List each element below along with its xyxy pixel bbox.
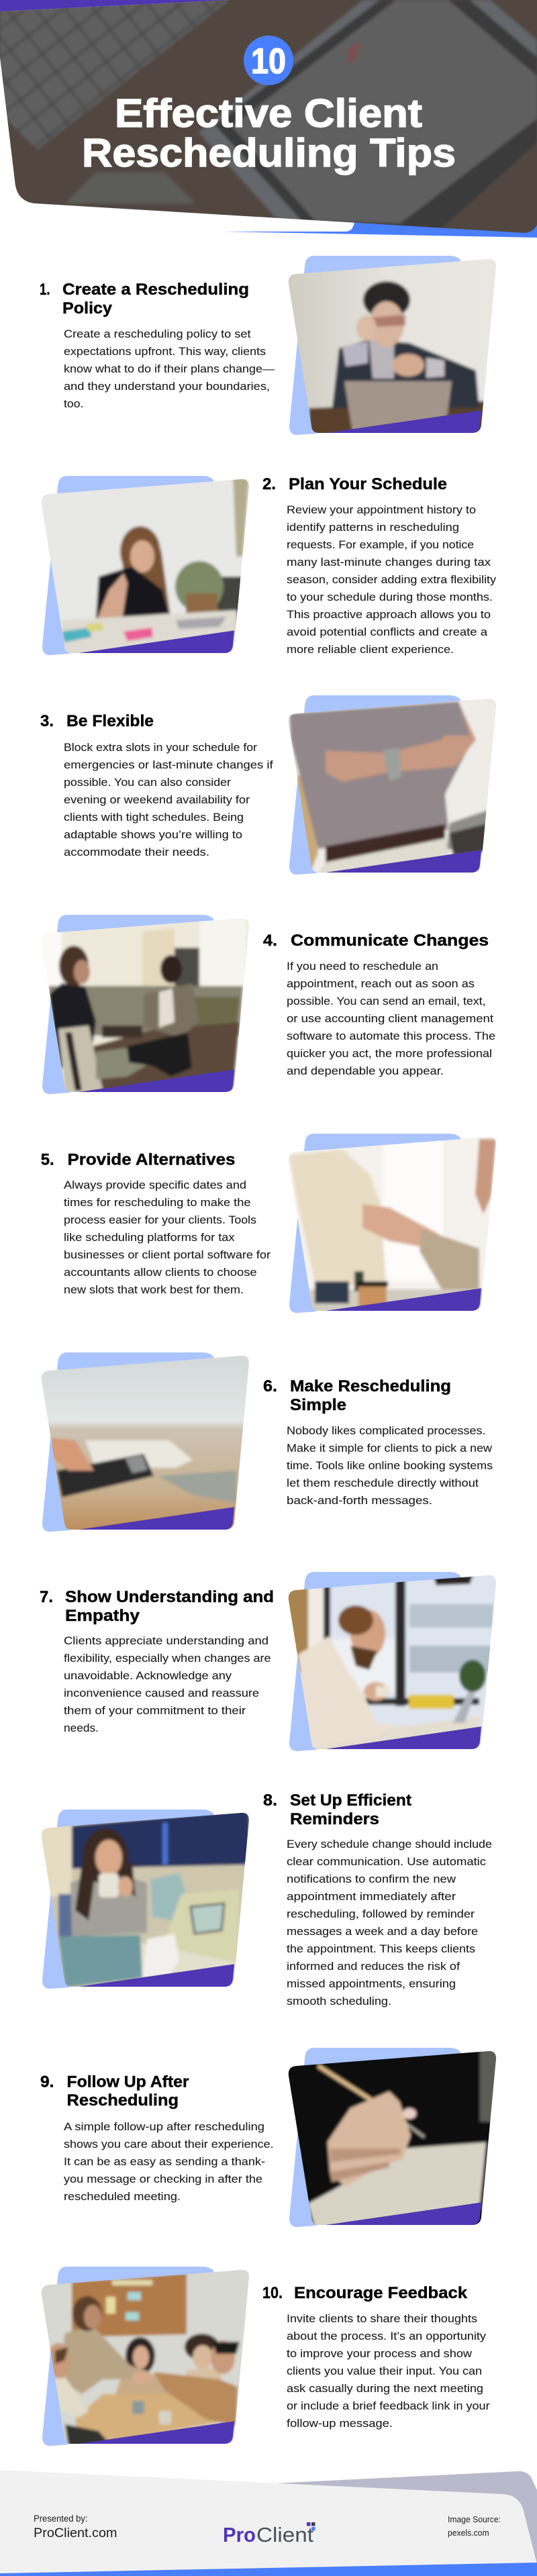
- tip 1 text: expectations upfront. This way, clients: [64, 346, 266, 358]
- tip 9 heading: 9.: [40, 2073, 54, 2091]
- presented by: ProClient.com: [34, 2526, 117, 2540]
- tip 2 heading: Plan Your Schedule: [289, 475, 447, 493]
- tip 9 text: shows you care about their experience.: [64, 2138, 274, 2150]
- tip 1 heading: Policy: [62, 299, 112, 317]
- tip 9 text: A simple follow-up after rescheduling: [64, 2121, 264, 2133]
- tip 6 text: let them reschedule directly without: [287, 1477, 479, 1489]
- tip 4 heading: Communicate Changes: [291, 932, 489, 950]
- tip 2 text: more reliable client experience.: [287, 644, 454, 656]
- tip 7 text: Clients appreciate understanding and: [64, 1635, 268, 1647]
- tip 2 heading: 2.: [262, 475, 276, 493]
- ProClient logo: [223, 2522, 315, 2546]
- tip 7 text: [64, 1635, 271, 1734]
- tip 1 text: too.: [64, 398, 83, 410]
- tip 7 heading: [40, 1588, 274, 1625]
- tip 8 text: missed appointments, ensuring: [287, 1978, 456, 1990]
- tip 8 heading: Set Up Efficient: [290, 1791, 411, 1810]
- ProClient logo: Client: [256, 2523, 313, 2546]
- tip 5 image card: [285, 1134, 500, 1316]
- tip 2 text: [287, 504, 497, 656]
- title: [82, 91, 456, 175]
- tip 2 text: Review your appointment history to: [287, 504, 476, 516]
- tip 10 text: clients you value their input. You can: [287, 2365, 482, 2377]
- tip 8 text: clear communication. Use automatic: [287, 1856, 486, 1868]
- tip 1 image card: [285, 256, 500, 437]
- tip 2 text: identify patterns in rescheduling: [287, 522, 459, 534]
- tip 7 text: flexibility, especially when changes are: [64, 1652, 271, 1665]
- panel: tip 6: [38, 1352, 493, 1534]
- tip 7 image card: [285, 1572, 500, 1753]
- tip 6 image card: [38, 1352, 253, 1534]
- panel: tip 4: [38, 915, 495, 1096]
- tip 10 text: [287, 2313, 490, 2430]
- tip 10 heading: Encourage Feedback: [294, 2284, 467, 2302]
- tip 4 text: appointment, reach out as soon as: [287, 978, 475, 990]
- tip 2 text: to your schedule during those months.: [287, 591, 493, 603]
- tip 8 text: messages a week and a day before: [287, 1926, 478, 1938]
- title: Effective Client: [115, 91, 422, 136]
- tip 9 heading: Rescheduling: [67, 2091, 179, 2110]
- tip 6 text: [287, 1425, 493, 1507]
- tip 5 text: new slots that work best for them.: [64, 1284, 244, 1296]
- image source: pexels.com: [448, 2528, 489, 2538]
- tip 4 text: quicker you act, the more professional: [287, 1048, 492, 1060]
- image source: Image Source:: [448, 2514, 501, 2524]
- tip 3 text: possible. You can also consider: [64, 777, 232, 789]
- tip 8 heading: [263, 1791, 411, 1828]
- panel: tip 3: [40, 695, 500, 877]
- tip 1 heading: [40, 281, 249, 317]
- tip 3 text: adaptable shows you’re willing to: [64, 829, 242, 841]
- tip 6 text: time. Tools like online booking systems: [287, 1460, 493, 1472]
- footer grey panel: [0, 2470, 537, 2576]
- tip 9 text: you message or checking in after the: [64, 2173, 262, 2185]
- tip 8 heading: Reminders: [290, 1810, 379, 1828]
- panel: tip 9: [40, 2048, 500, 2229]
- tip 10 text: Invite clients to share their thoughts: [287, 2313, 477, 2325]
- panel: tip 1: [40, 256, 500, 437]
- tip 6 heading: 6.: [263, 1377, 277, 1395]
- blue accent under banner: [223, 201, 537, 238]
- tip 2 text: avoid potential conflicts and create a: [287, 626, 488, 638]
- tip 5 text: accountants allow clients to choose: [64, 1267, 257, 1279]
- tip 3 text: accommodate their needs.: [64, 846, 209, 858]
- title: Rescheduling Tips: [82, 131, 456, 175]
- tip 9 text: rescheduled meeting.: [64, 2191, 181, 2203]
- tip 5 text: [64, 1179, 271, 1296]
- tip 8 heading: 8.: [263, 1791, 277, 1810]
- tip 7 text: needs.: [64, 1722, 99, 1734]
- tip 10 text: about the process. It’s an opportunity: [287, 2330, 487, 2342]
- tip 1 text: know what to do if their plans change—: [64, 363, 275, 375]
- tip 1 text: Create a rescheduling policy to set: [64, 328, 251, 340]
- tip 4 text: or use accounting client management: [287, 1013, 493, 1025]
- tip 1 heading: 1.: [40, 281, 50, 299]
- tip 8 text: Every schedule change should include: [287, 1838, 492, 1850]
- tip 6 heading: Make Rescheduling: [290, 1377, 451, 1395]
- tip 8 text: notifications to confirm the new: [287, 1873, 456, 1885]
- tip 5 text: Always provide specific dates and: [64, 1179, 246, 1191]
- tip 10 text: ask casually during the next meeting: [287, 2383, 483, 2395]
- tip 6 heading: [263, 1377, 451, 1414]
- number badge: [244, 36, 293, 85]
- tip 2 text: This proactive approach allows you to: [287, 609, 491, 621]
- tip 8 text: appointment immediately after: [287, 1891, 456, 1903]
- tip 7 text: unavoidable. Acknowledge any: [64, 1670, 232, 1682]
- tip 2 text: requests. For example, if you notice: [287, 539, 474, 551]
- tip 4 text: and dependable you appear.: [287, 1065, 444, 1077]
- tip 1 text: and they understand your boundaries,: [64, 381, 270, 393]
- tip 1 text: [64, 328, 275, 410]
- tip 5 text: businesses or client portal software for: [64, 1249, 271, 1261]
- tip 10 heading: 10.: [262, 2284, 283, 2302]
- panel: tip 10: [38, 2267, 490, 2448]
- panel: tip 5: [41, 1134, 500, 1316]
- image source: [448, 2514, 501, 2538]
- tip 2 text: many last-minute changes during tax: [287, 556, 491, 568]
- tip 8 text: smooth scheduling.: [287, 1995, 391, 2008]
- tip 4 text: [287, 960, 495, 1077]
- tip 8 text: [287, 1838, 492, 2008]
- presented by: Presented by:: [34, 2514, 88, 2524]
- banner photo: keyboard and tablet: [0, 0, 537, 242]
- ProClient logo: Pro: [223, 2523, 256, 2546]
- tip 6 heading: Simple: [290, 1396, 346, 1414]
- header banner: [0, 0, 537, 242]
- tip 3 text: emergencies or last-minute changes if: [64, 759, 273, 771]
- tip 7 heading: 7.: [40, 1588, 53, 1606]
- tip 4 text: possible. You can send an email, text,: [287, 995, 486, 1007]
- tip 5 heading: Provide Alternatives: [67, 1150, 235, 1169]
- tip 10 text: follow-up message.: [287, 2418, 393, 2430]
- tip 7 text: them of your commitment to their: [64, 1705, 246, 1717]
- tip 3 text: Block extra slots in your schedule for: [64, 742, 258, 754]
- tip 5 text: process easier for your clients. Tools: [64, 1214, 256, 1226]
- tip 2 text: season, consider adding extra flexibility: [287, 574, 497, 586]
- tip 2 image card: [38, 476, 253, 657]
- tip 10 text: to improve your process and show: [287, 2348, 472, 2360]
- tip 4 image card: [38, 915, 253, 1096]
- tip 3 text: [64, 742, 273, 858]
- tip 1 heading: Create a Rescheduling: [62, 281, 249, 299]
- number badge: 10: [251, 42, 286, 81]
- tip 7 heading: Show Understanding and: [65, 1588, 274, 1606]
- tip 3 heading: 3.: [40, 712, 54, 730]
- tip 8 text: informed and reduces the risk of: [287, 1961, 460, 1973]
- tip 9 text: It can be as easy as sending a thank-: [64, 2156, 265, 2168]
- tip 10 image card: [38, 2267, 253, 2448]
- tip 4 text: software to automate this process. The: [287, 1030, 495, 1042]
- panel: tip 8: [38, 1791, 492, 2008]
- tip 7 heading: Empathy: [65, 1607, 140, 1625]
- footer: [0, 2470, 537, 2576]
- tip 5 heading: 5.: [41, 1150, 54, 1169]
- tip 9 image card: [285, 2048, 500, 2229]
- tip 8 text: the appointment. This keeps clients: [287, 1943, 475, 1955]
- tip 9 heading: [40, 2073, 189, 2110]
- tip 3 text: evening or weekend availability for: [64, 794, 250, 806]
- tip 8 text: rescheduling, followed by reminder: [287, 1908, 475, 1920]
- tip 6 text: Nobody likes complicated processes.: [287, 1425, 486, 1437]
- tip 3 image card: [285, 695, 500, 877]
- tip 7 text: inconvenience caused and reassure: [64, 1687, 259, 1699]
- tip 6 text: Make it simple for clients to pick a new: [287, 1442, 492, 1454]
- presented by: [34, 2514, 117, 2540]
- tip 5 text: times for rescheduling to make the: [64, 1197, 251, 1209]
- tip 4 heading: 4.: [263, 932, 277, 950]
- panel: tip 2: [38, 475, 497, 657]
- tip 6 text: back-and-forth messages.: [287, 1495, 432, 1507]
- panel: tip 7: [40, 1572, 500, 1753]
- tip 10 text: or include a brief feedback link in your: [287, 2400, 490, 2412]
- tip 3 heading: Be Flexible: [66, 712, 154, 730]
- top purple band: [0, 0, 230, 11]
- tip 3 text: clients with tight schedules. Being: [64, 811, 244, 824]
- tip 9 text: [64, 2121, 274, 2203]
- footer lavender shape: [274, 2471, 537, 2567]
- tip 8 image card: [38, 1810, 253, 1991]
- tip 4 text: If you need to reschedule an: [287, 960, 438, 973]
- footer blue strip: [0, 2563, 537, 2576]
- tip 5 text: like scheduling platforms for tax: [64, 1232, 235, 1244]
- tip 9 heading: Follow Up After: [67, 2073, 189, 2091]
